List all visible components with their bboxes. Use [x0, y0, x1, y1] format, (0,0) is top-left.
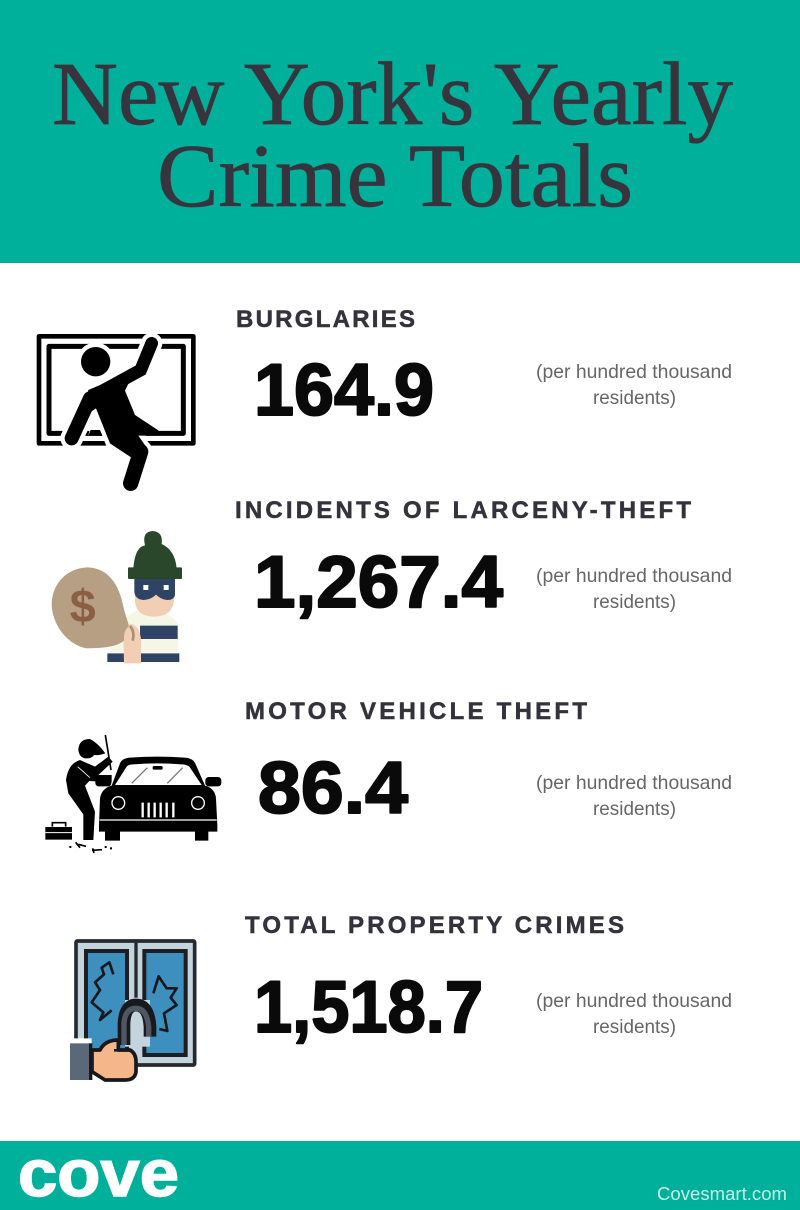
car	[99, 757, 217, 841]
value: 1,518.7	[254, 967, 483, 1048]
unit note	[536, 565, 732, 613]
toolbox	[45, 827, 72, 840]
unit note: residents)	[593, 591, 676, 613]
value: 86.4	[258, 748, 408, 829]
unit note: residents)	[593, 1016, 676, 1038]
value: 164.9	[254, 350, 434, 431]
icon: thief breaking into car	[45, 735, 221, 853]
value: 1,267.4	[254, 542, 503, 623]
scattered tools	[76, 842, 102, 853]
icon: thief with money bag: $	[70, 580, 96, 632]
unit note: (per hundred thousand	[536, 772, 732, 794]
unit note	[536, 772, 732, 820]
unit note: residents)	[593, 798, 676, 820]
icon: thief with money bag	[52, 531, 182, 663]
header band	[0, 0, 800, 263]
website: Covesmart.com	[657, 1183, 787, 1204]
heading: INCIDENTS OF LARCENY-THEFT	[235, 497, 691, 524]
panel: larceny-theft	[52, 497, 732, 663]
panel: total property crimes	[70, 912, 732, 1080]
person	[78, 739, 105, 758]
title	[52, 45, 733, 226]
logo: cove: cove	[18, 1136, 179, 1210]
unit note: residents)	[593, 387, 676, 409]
panel: burglaries	[39, 306, 732, 483]
heading: BURGLARIES	[236, 306, 415, 333]
heading: MOTOR VEHICLE THEFT	[245, 698, 587, 725]
unit note: (per hundred thousand	[536, 361, 732, 383]
footer band	[0, 1136, 800, 1210]
icon: hand breaking window with crowbar	[70, 941, 195, 1080]
unit note: (per hundred thousand	[536, 990, 732, 1012]
panel: motor vehicle theft	[45, 698, 732, 853]
title: Crime Totals	[157, 127, 633, 226]
heading: TOTAL PROPERTY CRIMES	[245, 912, 624, 939]
unit note	[536, 361, 732, 409]
unit note: (per hundred thousand	[536, 565, 732, 587]
icon: burglar climbing through window	[39, 336, 193, 483]
title: New York's Yearly	[52, 45, 733, 144]
unit note	[536, 990, 732, 1038]
